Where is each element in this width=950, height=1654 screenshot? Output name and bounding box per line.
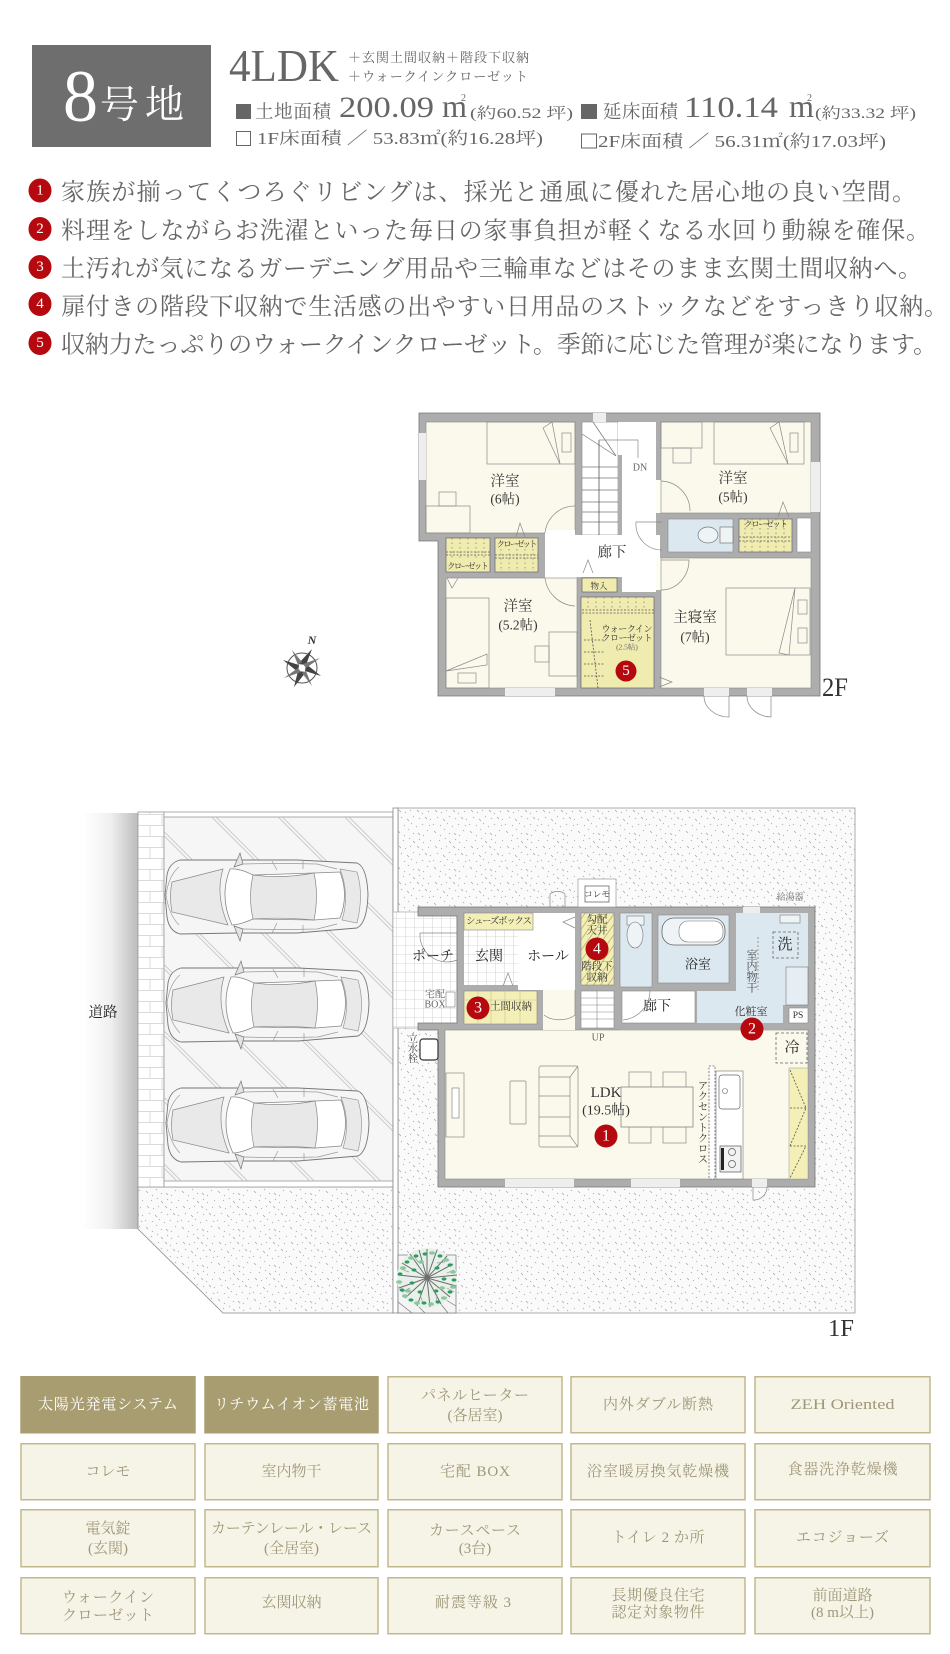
tag: double insulation <box>571 1377 745 1433</box>
room: closet right <box>739 519 792 552</box>
feature 1: 家族が揃ってくつろぐリビングは、採光と通風に優れた居心地の良い空間。 <box>61 179 916 206</box>
tag: panel heater: (各居室) <box>448 1406 502 1424</box>
under-stair storage <box>581 912 614 985</box>
header: lot badge: 号地 <box>100 74 184 130</box>
LDK <box>445 990 808 1179</box>
low table <box>510 1081 526 1124</box>
tag: solar: 太陽光発電システム <box>38 1396 178 1413</box>
marker 1: 1 <box>602 1128 610 1144</box>
hallway 2F: DN <box>633 462 647 474</box>
room: closet center: クローゼット <box>496 539 538 549</box>
header: land area: 2 <box>461 93 466 104</box>
header: total floor area: (約33.32 坪) <box>815 105 916 122</box>
room: storage <box>582 560 617 592</box>
road <box>83 813 138 1229</box>
feature list <box>28 178 948 358</box>
room: closet left <box>446 538 490 572</box>
accent wall <box>696 1066 715 1179</box>
faucet <box>406 1032 438 1063</box>
room: western room 5: 洋室 <box>718 469 748 487</box>
room: master bedroom: (7帖) <box>680 628 710 644</box>
Cole-Mo charger: コレモ <box>584 889 610 899</box>
tag: dishwasher <box>755 1444 930 1500</box>
parking slab <box>164 812 393 1187</box>
tag: front road <box>755 1578 930 1634</box>
fridge: 冷 <box>784 1039 800 1056</box>
walls 1F <box>418 907 815 1187</box>
room: walk-in closet: ウォークイン <box>602 624 652 634</box>
room: western room 6 <box>426 422 575 537</box>
tag: electric lock: 電気錠 <box>85 1520 131 1537</box>
tag: seismic grade <box>388 1578 562 1634</box>
tag: Cole-Mo: コレモ <box>85 1464 131 1480</box>
header: total floor area: 110.14 <box>684 91 778 124</box>
hallway 2F <box>545 422 661 592</box>
LDK: (19.5帖) <box>582 1102 630 1118</box>
tag: long-life housing <box>571 1578 745 1634</box>
toilet 1F <box>620 913 652 987</box>
room: closet center <box>495 538 538 572</box>
tag: entry storage: 玄関収納 <box>261 1593 322 1611</box>
room: western room 5.2: 洋室 <box>504 597 532 615</box>
room: western room 5.2: (5.2帖) <box>498 616 538 632</box>
tag: electric lock <box>21 1510 195 1567</box>
marker 4: 4 <box>593 940 601 958</box>
room: walk-in closet <box>581 597 654 688</box>
kitchen counter <box>716 1071 743 1179</box>
pantry shelf <box>789 1068 808 1179</box>
marker 3: 3 <box>474 1000 482 1016</box>
tag: eco jaws <box>755 1510 930 1567</box>
equipment grid <box>21 1377 930 1634</box>
entry storage <box>464 973 537 1024</box>
car 1 <box>165 853 368 941</box>
shoe box <box>464 913 533 930</box>
Cole-Mo charger <box>578 879 616 907</box>
header: lot badge: 8 <box>63 56 98 138</box>
header: total floor area <box>581 88 916 124</box>
tag: walk-in closet: クローゼット <box>62 1608 154 1624</box>
tag: electric lock: (玄関) <box>88 1539 128 1557</box>
header: layout type <box>229 40 529 91</box>
tag: indoor drying: 室内物干 <box>261 1462 322 1480</box>
floor plan: 1F <box>393 879 815 1200</box>
room: western room 6: (6帖) <box>490 490 520 506</box>
washroom: 給湯器 <box>776 891 804 902</box>
feature 2: 料理をしながらお洗濯といった毎日の家事負担が軽くなる水回り動線を確保。 <box>61 218 930 244</box>
TV board <box>446 1073 464 1137</box>
tag: eco jaws: エコジョーズ <box>796 1529 889 1546</box>
PS shaft <box>789 1008 808 1023</box>
room: western room 5.2 <box>446 506 577 688</box>
washroom: 洗 <box>777 936 793 953</box>
tag: delivery box: 宅配 BOX <box>440 1463 510 1480</box>
tag: dishwasher: 食器洗浄乾燥機 <box>788 1460 898 1478</box>
porch tile: ポーチ <box>412 948 454 964</box>
tag: two toilets <box>571 1510 745 1567</box>
tag: bath dryer: 浴室暖房換気乾燥機 <box>587 1462 730 1480</box>
label 2F: 2F <box>822 673 848 702</box>
marker 2: 2 <box>748 1020 756 1038</box>
tag: curtain rails <box>205 1510 378 1567</box>
tag: long-life housing: 長期優良住宅 <box>612 1587 704 1604</box>
tag: two toilets: トイレ 2 か所 <box>612 1529 704 1546</box>
entrance <box>464 913 518 985</box>
tag: front road: 前面道路 <box>812 1587 873 1604</box>
bathroom: 浴室 <box>685 956 711 972</box>
header: layout type: ＋ウォークインクローゼット <box>348 69 528 84</box>
windows and exterior doors 2F <box>419 413 820 717</box>
tag: ZEH: ZEH Oriented <box>790 1397 895 1413</box>
site: parking and grounds <box>138 808 855 1342</box>
marker 5: 5 <box>622 663 630 679</box>
tag: panel heater: パネルヒーター <box>421 1387 529 1404</box>
LDK: LDK <box>591 1085 622 1101</box>
header: land area: 土地面積 <box>255 102 332 123</box>
room: closet left: クローゼット <box>447 561 489 571</box>
tag: car space: (3台) <box>459 1540 491 1557</box>
tag: front road: (8 m以上) <box>811 1604 874 1621</box>
tag: long-life housing: 認定対象物件 <box>612 1603 704 1621</box>
feature 3: 3 <box>36 259 44 275</box>
tag: solar <box>21 1377 195 1433</box>
tree <box>396 1248 457 1313</box>
feature 1: 1 <box>36 182 44 198</box>
accent wall: アクセントクロス <box>696 1080 708 1164</box>
stairs 1F: UP <box>592 1032 605 1044</box>
tag: walk-in closet: ウォークイン <box>62 1590 154 1606</box>
header: land area: m <box>442 88 467 124</box>
header: layout type: ＋玄関土間収納＋階段下収納 <box>348 50 529 65</box>
header: land area <box>236 88 573 124</box>
feature 4: 扉付きの階段下収納で生活感の出やすい日用品のストックなどをすっきり収納。 <box>61 294 948 320</box>
tag: double insulation: 内外ダブル断熱 <box>603 1395 714 1413</box>
tag: Cole-Mo <box>21 1444 195 1500</box>
marker 2 <box>740 1018 764 1040</box>
header: 2F floor area: 2F床面積 ／ 56.31㎡(約17.03坪) <box>598 132 886 151</box>
tag: car space <box>388 1510 562 1567</box>
washroom <box>697 891 808 1040</box>
gravel right <box>398 808 855 1313</box>
sofa <box>539 1066 578 1147</box>
under-stair storage: 勾配 <box>586 912 608 926</box>
tag: car space: カースペース <box>429 1523 521 1539</box>
header: 1F floor area: 1F床面積 ／ 53.83㎡(約16.28坪) <box>257 129 543 148</box>
gravel bottom <box>138 1187 393 1313</box>
entrance hall: ホール <box>527 950 569 964</box>
tag: walk-in closet <box>21 1578 195 1634</box>
car 2 <box>166 961 369 1049</box>
tag: curtain rails: カーテンレール・レース <box>211 1521 372 1537</box>
header: land area: (約60.52 坪) <box>470 105 573 122</box>
tag: curtain rails: (全居室) <box>264 1539 319 1557</box>
windows and doors 1F <box>505 891 767 1200</box>
room: master bedroom: 主寝室 <box>673 608 717 626</box>
boundary wall <box>393 808 398 1313</box>
tag: indoor drying <box>205 1444 378 1500</box>
entrance: 玄関 <box>475 948 503 964</box>
hallway 2F: 廊下 <box>598 543 626 561</box>
entrance hall <box>518 913 575 1020</box>
tag: entry storage <box>205 1578 378 1634</box>
tag: bath dryer <box>571 1444 745 1500</box>
marker 1 <box>594 1124 618 1148</box>
feature 2: 2 <box>36 221 44 237</box>
room: western room 6: 洋室 <box>490 472 520 490</box>
porch tile: BOX <box>424 1000 446 1010</box>
stairs 1F <box>581 991 614 1044</box>
room: western room 5: (5帖) <box>718 488 748 504</box>
tag: ZEH <box>755 1377 930 1433</box>
washroom: 室内物干 <box>745 948 758 994</box>
road: 道路 <box>88 1004 118 1021</box>
label 1F: 1F <box>828 1316 854 1342</box>
room: walk-in closet: (2.5帖) <box>616 642 638 652</box>
tag: battery: リチウムイオン蓄電池 <box>214 1395 369 1413</box>
header: total floor area: 延床面積 <box>603 101 679 123</box>
PS shaft: PS <box>793 1011 803 1021</box>
bathroom <box>658 915 729 983</box>
washroom: 化粧室 <box>734 1004 768 1018</box>
under-stair storage: 収納 <box>586 970 608 984</box>
under-stair storage: 天井 <box>586 924 608 936</box>
icon: compass: N <box>307 633 318 647</box>
room: walk-in closet: クローゼット <box>602 633 652 643</box>
brick strip <box>138 812 164 1187</box>
feature 5: 5 <box>36 335 44 351</box>
tag: seismic grade: 耐震等級 3 <box>435 1594 511 1611</box>
icon: compass <box>283 633 321 687</box>
entry storage: 土間収納 <box>490 1000 532 1012</box>
room: storage: 物入 <box>590 581 608 591</box>
feature 3: 土汚れが気になるガーデニング用品や三輪車などはそのまま玄関土間収納へ。 <box>61 256 922 282</box>
dining set <box>621 1072 693 1143</box>
tag: panel heater <box>388 1377 562 1433</box>
faucet: 立水栓 <box>406 1032 418 1063</box>
room: closet right: クローゼット <box>744 519 788 529</box>
hallway 1F: 廊下 <box>643 998 671 1014</box>
fridge <box>776 1033 807 1063</box>
stairs 2F <box>582 422 622 535</box>
floor plan: 2F <box>419 413 848 717</box>
porch tile <box>393 912 457 1028</box>
shoe box: シューズボックス <box>466 916 532 927</box>
under-stair storage: 階段下 <box>581 960 613 972</box>
walls 2F <box>419 413 820 696</box>
header: lot badge <box>32 45 211 147</box>
hallway 1F <box>622 990 695 1023</box>
porch tile: 宅配 <box>425 988 445 1000</box>
tag: battery <box>205 1377 378 1433</box>
header: total floor area: m <box>789 88 814 124</box>
room: western room 5 <box>661 422 811 517</box>
room: master bedroom <box>659 558 811 688</box>
header: land area: 200.09 <box>339 91 434 124</box>
header: total floor area: 2 <box>807 93 812 104</box>
room: toilet 2F <box>636 519 733 552</box>
header: layout type: 4LDK <box>229 40 339 91</box>
car 3 <box>166 1081 369 1169</box>
feature 4: 4 <box>36 296 44 312</box>
tag: delivery box <box>388 1444 562 1500</box>
feature 5: 収納力たっぷりのウォークインクローゼット。季節に応じた管理が楽になります。 <box>61 332 937 358</box>
